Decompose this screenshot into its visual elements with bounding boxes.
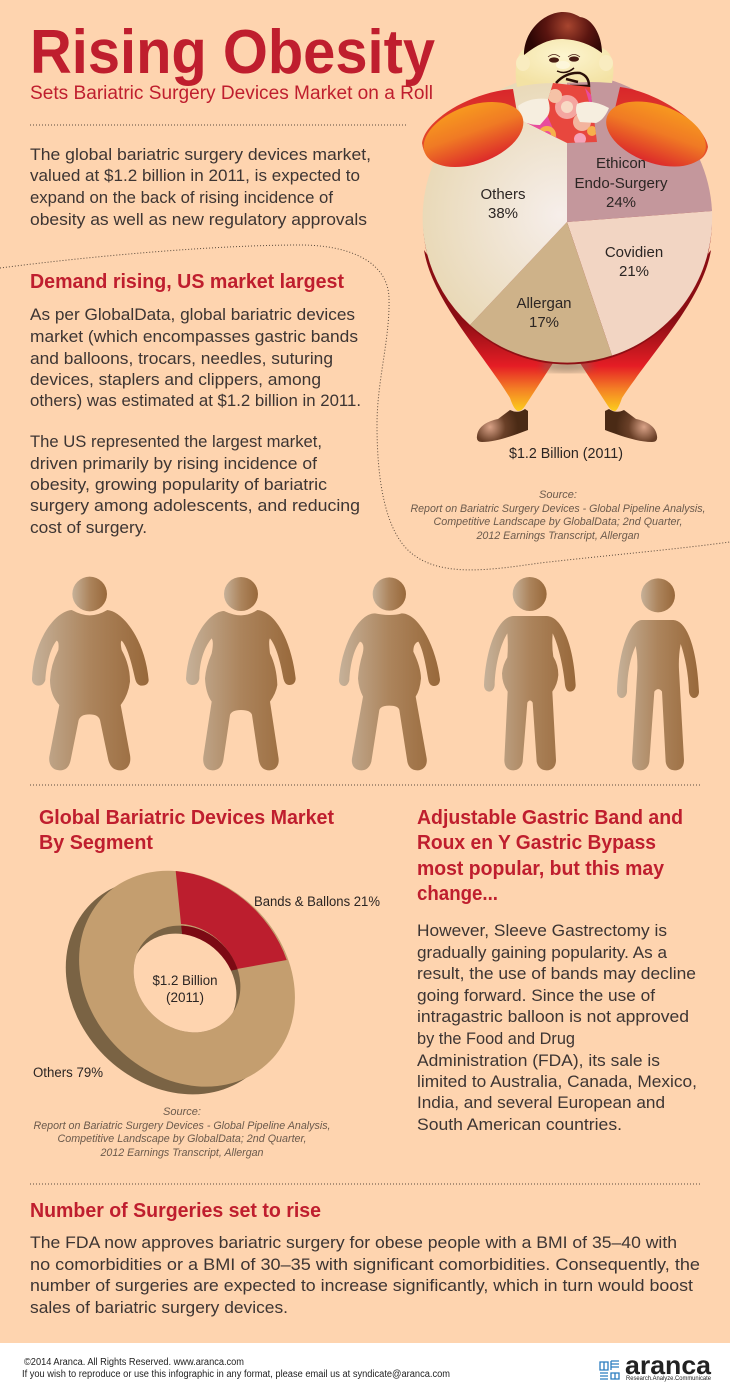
text: demand paragraph: market (which encompasses gastric bands	[30, 327, 358, 346]
source note: Source:	[163, 1106, 201, 1118]
donut labels	[33, 894, 380, 1080]
intro text: expand on the back of rising incidence of	[30, 188, 333, 207]
text: demand paragraph: driven primarily by rising incidence of	[30, 454, 317, 473]
pie labels: Covidien	[605, 244, 663, 261]
pie labels: $1.2 Billion (2011)	[509, 445, 623, 462]
pie labels: 21%	[619, 263, 649, 280]
logo icon	[600, 1361, 619, 1379]
donut labels: Others 79%	[33, 1065, 103, 1080]
pie labels: 24%	[606, 194, 636, 211]
intro text: The global bariatric surgery devices market,	[30, 145, 371, 164]
text: sleeve gastrectomy paragraph: going forward. Since the use of	[417, 986, 655, 1005]
text: demand paragraph: obesity, growing popularity of bariatric	[30, 475, 328, 494]
heading: number of surgeries: Number of Surgeries set to rise	[30, 1200, 321, 1222]
icon: person 2	[186, 577, 296, 770]
text: demand paragraph: devices, staplers and clippers, among	[30, 370, 321, 389]
icon: person 5	[617, 578, 699, 770]
donut labels: $1.2 Billion	[152, 973, 218, 988]
heading: gastric band: Adjustable Gastric Band and	[417, 807, 683, 829]
heading: demand rising: Demand rising, US market largest	[30, 271, 344, 293]
source note: 2012 Earnings Transcript, Allergan	[100, 1147, 263, 1159]
footer	[0, 1343, 730, 1395]
icon: person 1	[32, 577, 149, 770]
icon: shoes	[477, 409, 657, 442]
icon: patterned tie	[527, 83, 597, 143]
text: sleeve gastrectomy paragraph: intragastric balloon is not approved	[417, 1007, 689, 1026]
heading: market by segment	[39, 807, 334, 854]
heading: gastric band	[417, 807, 683, 905]
donut labels: Bands & Ballons 21%	[254, 894, 380, 909]
logo wordmark: aranca	[625, 1350, 712, 1380]
source note: 2012 Earnings Transcript, Allergan	[476, 530, 640, 542]
text: surgeries paragraph: no comorbidities or a BMI of 30–35 with significant comorbidities. Consequently, the	[30, 1255, 700, 1274]
text: surgeries paragraph: The FDA now approves bariatric surgery for obese people with a BMI of 35–40 with	[30, 1233, 677, 1252]
pie chart	[423, 73, 712, 363]
source note	[410, 489, 706, 542]
text: surgeries paragraph	[30, 1233, 700, 1317]
text: sleeve gastrectomy paragraph	[417, 921, 697, 1134]
footer copyright	[22, 1357, 450, 1380]
text: surgeries paragraph: sales of bariatric surgery devices.	[30, 1298, 288, 1317]
text: sleeve gastrectomy paragraph: gradually gaining popularity. As a	[417, 943, 668, 962]
pie labels: 38%	[488, 205, 518, 222]
source note: Report on Bariatric Surgery Devices - Global Pipeline Analysis,	[34, 1120, 330, 1132]
text: demand paragraph: The US represented the largest market,	[30, 432, 322, 451]
icon: hands	[518, 99, 609, 125]
source note: Source:	[539, 489, 577, 501]
pie labels: 17%	[529, 314, 559, 331]
source note: Competitive Landscape by GlobalData; 2nd Quarter,	[58, 1133, 306, 1145]
pie labels: Endo-Surgery	[574, 175, 668, 192]
source note: Competitive Landscape by GlobalData; 2nd Quarter,	[434, 516, 682, 528]
subtitle: Sets Bariatric Surgery Devices Market on a Roll	[30, 83, 433, 104]
text: demand paragraph: cost of surgery.	[30, 518, 147, 537]
footer copyright: ©2014 Aranca. All Rights Reserved. www.aranca.com	[24, 1357, 244, 1368]
intro text: obesity as well as new regulatory approvals	[30, 210, 367, 229]
heading: gastric band: Roux en Y Gastric Bypass	[417, 832, 656, 854]
donut chart	[66, 870, 295, 1094]
text: sleeve gastrectomy paragraph: limited to Australia, Canada, Mexico,	[417, 1072, 697, 1091]
intro text	[30, 145, 371, 229]
logo wordmark: Research.Analyze.Communicate	[626, 1376, 712, 1382]
people icons: obese to normal	[32, 577, 699, 770]
heading: gastric band: most popular, but this may	[417, 858, 665, 880]
text: demand paragraph: surgery among adolescents, and reducing	[30, 496, 360, 515]
icon: arms	[415, 89, 715, 180]
pie labels: Allergan	[516, 295, 572, 312]
text: sleeve gastrectomy paragraph: by the Food and Drug	[417, 1029, 575, 1048]
source note: Report on Bariatric Surgery Devices - Global Pipeline Analysis,	[410, 503, 706, 515]
icon: arm backs	[422, 87, 708, 163]
text: demand paragraph: others) was estimated at $1.2 billion in 2011.	[30, 391, 361, 410]
intro text: valued at $1.2 billion in 2011, is expected to	[30, 166, 360, 185]
text: demand paragraph	[30, 305, 361, 537]
heading: gastric band: change...	[417, 883, 498, 905]
source note	[34, 1106, 330, 1159]
pie labels: Ethicon	[596, 155, 646, 172]
text: sleeve gastrectomy paragraph: result, the use of bands may decline	[417, 964, 696, 983]
icon: person 4	[484, 577, 576, 770]
pie labels	[480, 155, 668, 462]
text: demand paragraph: As per GlobalData, global bariatric devices	[30, 305, 355, 324]
text: sleeve gastrectomy paragraph: India, and several European and	[417, 1093, 665, 1112]
pie labels: Others	[480, 186, 526, 203]
heading: market by segment: By Segment	[39, 832, 153, 854]
title: Rising Obesity	[30, 18, 435, 87]
text: sleeve gastrectomy paragraph: However, Sleeve Gastrectomy is	[417, 921, 667, 940]
icon: head	[516, 12, 613, 87]
text: sleeve gastrectomy paragraph: South American countries.	[417, 1115, 622, 1134]
heading: market by segment: Global Bariatric Devices Market	[39, 807, 334, 829]
pie character illustration	[415, 12, 715, 442]
donut labels: (2011)	[166, 990, 204, 1005]
text: surgeries paragraph: number of surgeries are expected to increase significantly, which in turn would boost	[30, 1276, 693, 1295]
text: sleeve gastrectomy paragraph: Administration (FDA), its sale is	[417, 1051, 660, 1070]
icon: legs	[424, 250, 711, 411]
footer copyright: If you wish to reproduce or use this infographic in any format, please email us at syndicate@aranca.com	[22, 1369, 450, 1380]
text: demand paragraph: and balloons, trocars, needles, suturing	[30, 349, 333, 368]
icon: person 3	[339, 577, 440, 770]
